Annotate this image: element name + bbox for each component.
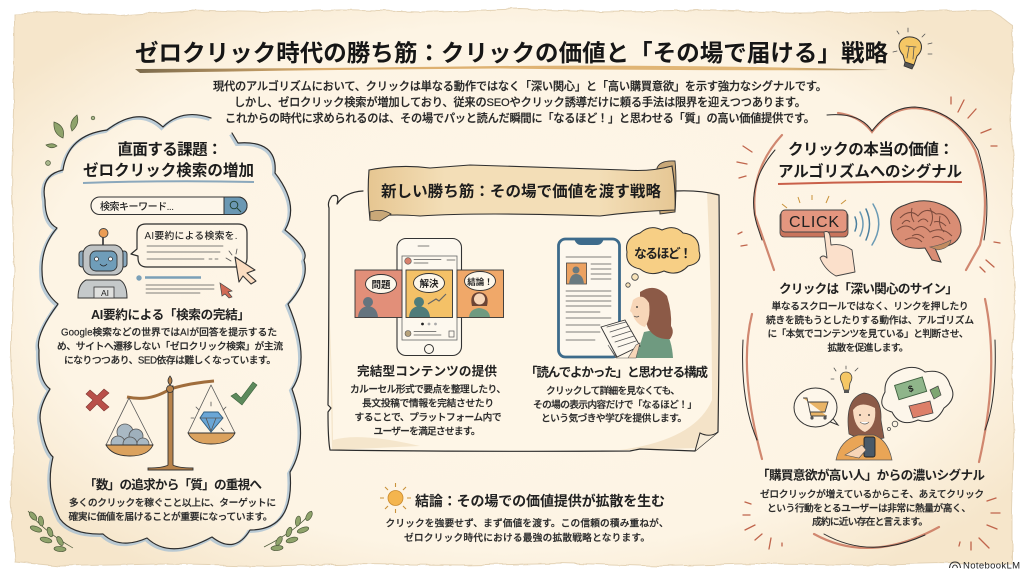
purchase signal text: 「購買意欲が高い人」からの濃いシグナル	[757, 468, 985, 482]
carousel text: することで、プラットフォーム内で	[354, 410, 502, 424]
reading text: 「読んでよかった」と思わせる構成	[525, 364, 708, 380]
scroll paper	[328, 191, 719, 451]
result lines	[136, 275, 214, 293]
intro text: しかし、ゼロクリック検索が増加しており、従来のSEOやクリック誘導だけに頼る手法は限界を迎えつつあります。	[234, 95, 806, 109]
quality text: 「数」の追求から「質」の重視へ	[84, 477, 262, 492]
thought bubble: naruhodo: なるほど！	[634, 246, 692, 261]
conclusion text	[386, 516, 668, 544]
panel: true click value heart	[737, 97, 1000, 550]
conclusion	[380, 483, 668, 544]
carousel text: ユーザーを満足させます。	[374, 424, 480, 438]
AI summary text: め、サイトへ遷移しない「ゼロクリック検索」が主流	[57, 340, 283, 352]
reading text: クリックして詳細を見なくても、	[546, 384, 680, 397]
icon: money thought bubble: $	[907, 383, 915, 394]
icon: woman with phone	[836, 393, 892, 460]
thought bubble: naruhodo	[626, 228, 700, 287]
intro text: 現代のアルゴリズムにおいて、クリックは単なる動作ではなく「深い関心」と「高い購買意欲」を示す強力なシグナルです。	[213, 79, 827, 93]
purchase signal text	[757, 468, 985, 528]
icon: cursor	[235, 257, 256, 284]
heading	[83, 140, 254, 183]
icon: money thought bubble	[882, 367, 953, 430]
heart heading	[778, 140, 962, 184]
deep interest text: 単なるスクロールではなく、リンクを押したり	[772, 300, 968, 312]
banner	[368, 161, 676, 221]
title: ゼロクリック時代の勝ち筋：クリックの価値と「その場で届ける」戦略	[135, 39, 888, 66]
panel: challenges cloud	[28, 115, 314, 552]
AI summary text: Google検索などの世界ではAIが回答を提示するた	[61, 326, 277, 338]
icon: sun	[380, 483, 411, 513]
reading text	[525, 364, 708, 424]
deep interest text: 拡散を促進します。	[828, 341, 908, 354]
AI summary speech bubble	[131, 224, 247, 267]
icon: shopping cart bubble	[794, 388, 838, 427]
AI summary speech bubble: AI要約による検索を.	[144, 229, 238, 242]
deep interest text: 続きを読もうとしたりする動作は、アルゴリズム	[766, 314, 974, 326]
conclusion heading: 結論：その場での価値提供が拡散を生む	[415, 493, 665, 509]
purchase signal text: という行動をとるユーザーは非常に熱量が高く、	[767, 502, 971, 514]
reading text: その場の表示内容だけで「なるほど！」	[533, 398, 697, 411]
heart heading: クリックの本当の価値：	[788, 140, 954, 158]
deep interest text	[766, 282, 974, 354]
carousel card: conclusion: 結論！	[467, 277, 493, 287]
carousel card: solution: 解決	[419, 278, 439, 290]
icon: right branch	[264, 510, 314, 551]
icon: hand	[820, 232, 855, 276]
AI summary text	[57, 307, 283, 366]
heart heading: アルゴリズムへのシグナル	[778, 162, 962, 180]
cloud outline	[37, 115, 305, 550]
carousel card: problem	[355, 270, 402, 318]
reading text: という気づきや学びを提供します。	[541, 412, 687, 424]
icon: balance scale	[106, 376, 235, 470]
icon: robot: AI	[101, 288, 109, 298]
intro text	[213, 79, 827, 125]
click button: CLICK	[789, 214, 839, 231]
icon: red cursor	[220, 283, 232, 298]
icon: green check	[231, 382, 257, 405]
AI summary text: になりつつあり、SED依存は難しくなっています。	[64, 354, 276, 366]
quality text	[68, 477, 276, 523]
conclusion text: クリックを強要せず、まず価値を渡す。この信頼の積み重ねが、	[386, 516, 668, 530]
NotebookLM watermark: NotebookLM	[963, 560, 1020, 572]
icon: robot	[78, 228, 127, 298]
icon: left branch	[28, 511, 73, 552]
AI summary text: AI要約による「検索の完結」	[91, 307, 250, 322]
click button	[780, 195, 848, 237]
conclusion text: ゼロクリック時代における最強の拡散戦略となります。	[404, 531, 650, 544]
banner: 新しい勝ち筋：その場で価値を渡す戦略	[381, 182, 661, 200]
decorative rays	[737, 97, 1000, 550]
search bar: 検索キーワード...	[100, 200, 174, 213]
heart outline	[743, 107, 995, 548]
search bar	[91, 197, 247, 214]
icon: small bulb	[831, 366, 858, 393]
heading: 直面する課題：	[118, 140, 222, 158]
carousel card: conclusion	[457, 270, 504, 318]
heading: ゼロクリック検索の増加	[83, 160, 254, 180]
icon: red cross	[86, 389, 109, 411]
intro text: これからの時代に求められるのは、その場でパッと読んだ瞬間に「なるほど！」と思わせる「質」の高い価値提供です。	[225, 111, 815, 125]
purchase signal text: 成約に近い存在と言えます。	[812, 515, 928, 528]
icon: smartphone with carousel	[397, 238, 462, 356]
purchase signal text: ゼロクリックが増えているからこそ、あえてクリック	[760, 488, 984, 500]
carousel card: problem: 問題	[371, 280, 391, 291]
panel: strategy scroll	[328, 161, 719, 451]
icon: signal waves	[855, 204, 879, 245]
quality text: 多くのクリックを稼ぐこと以上に、ターゲットに	[69, 496, 276, 509]
carousel card: solution	[406, 270, 452, 318]
icon: woman reading	[601, 288, 673, 358]
carousel text: 長文投稿で情報を完結させたり	[362, 396, 494, 410]
carousel text: 完結型コンテンツの提供	[357, 364, 497, 378]
icon: light bulb	[893, 28, 932, 69]
carousel text: カルーセル形式で要点を整理したり、	[350, 382, 506, 396]
icon: brain	[891, 201, 961, 262]
carousel text	[350, 364, 506, 438]
deep interest text: に「本気でコンテンツを見ている」と判断させ、	[768, 327, 968, 340]
icon: leaves top	[46, 115, 95, 165]
quality text: 確実に価値を届けることが重要になっています。	[68, 510, 272, 523]
icon: tablet article	[558, 238, 620, 357]
deep interest text: クリックは「深い関心のサイン」	[779, 282, 958, 296]
